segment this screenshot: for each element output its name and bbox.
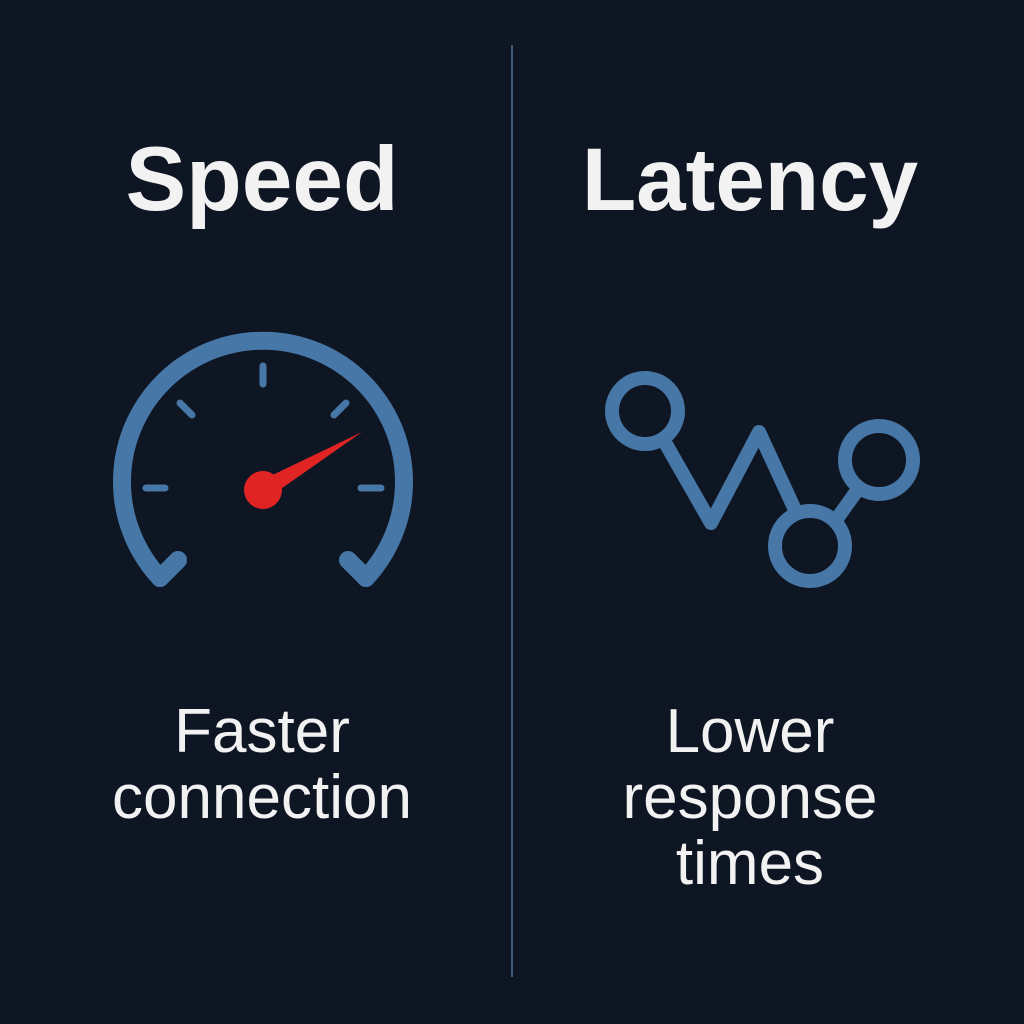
text: Lower response times: times [676,829,824,898]
title: Speed: Speed [125,129,399,230]
text: Faster connection [112,697,412,832]
text: Lower response times: response [622,763,878,832]
text: Faster connection: connection [112,763,412,832]
text: Lower response times [622,697,878,898]
text: Faster connection: Faster [174,697,350,766]
title: Latency: Latency [582,129,918,229]
text: Lower response times: Lower [666,697,834,766]
divider [511,45,513,977]
